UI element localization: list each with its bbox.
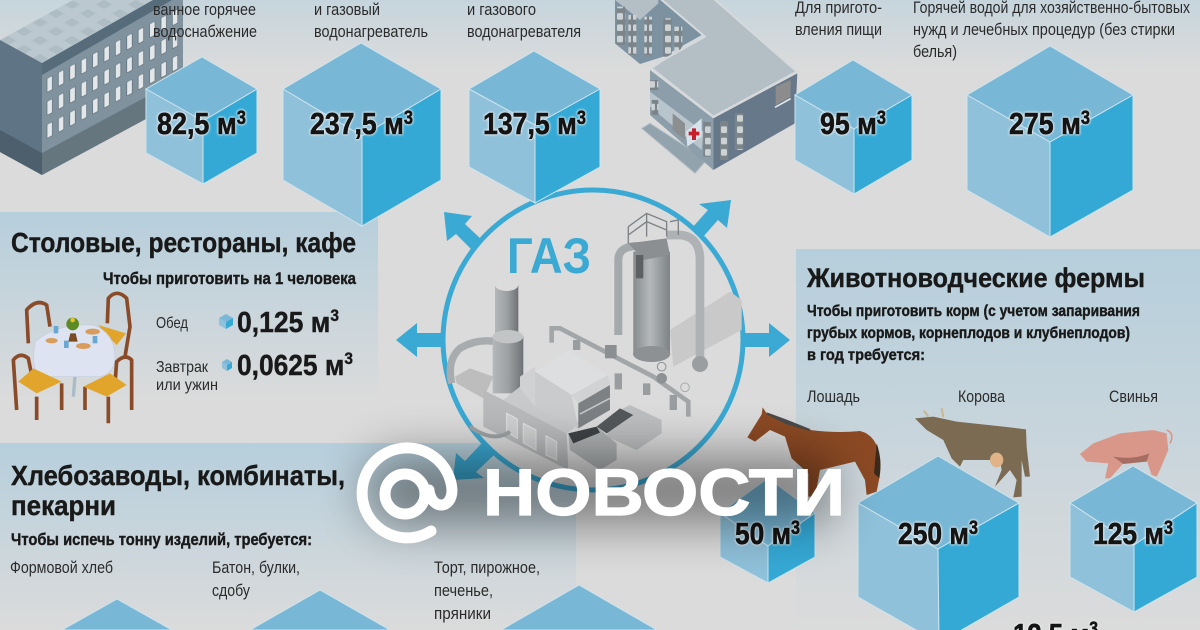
subheading: feed: Чтобы приготовить корм (с учетом запаривания — [807, 303, 1140, 320]
cube: 82,5 m3: 3 — [237, 108, 246, 129]
text: apartments hot water supply: водоснабжение — [153, 22, 257, 41]
label: pig: Свинья — [1109, 387, 1158, 406]
label: cakes and pastries: печенье, — [434, 581, 493, 600]
heading: bakeries: Хлебозаводы, комбинаты, — [11, 460, 345, 491]
panel: canteens and restaurants — [0, 212, 378, 423]
logo: Mail.ru news — [362, 448, 845, 538]
cube: 50 m3: 50 м — [735, 516, 801, 551]
icon: small cube — [222, 359, 232, 371]
label: cow: Корова — [958, 387, 1005, 406]
text: gas stove and water heater: и газовый — [314, 0, 380, 19]
label: tin bread: Формовой хлеб — [10, 558, 113, 577]
illustration: gas turbine machinery — [450, 279, 689, 470]
cube: 275 m3: 3 — [1081, 108, 1090, 129]
text: cooking: вления пищи — [795, 20, 882, 39]
text: cooking — [795, 0, 882, 39]
icon: horse — [747, 407, 881, 497]
cube: 237,5 m3: 237,5 м — [310, 106, 419, 141]
cube: 82,5 m3 — [146, 57, 257, 184]
cube: loaves — [250, 590, 390, 630]
cube: 50 m3: 3 — [791, 518, 800, 539]
cube: tin bread — [62, 599, 172, 630]
icon: hospital — [615, 0, 797, 173]
value: 0,125 m3: 3 — [330, 306, 339, 325]
arrow: upper left — [444, 212, 482, 250]
cube: 250 m3: 250 м — [898, 516, 981, 551]
subheading: feed: в год требуется: — [807, 347, 925, 364]
label: breakfast or dinner — [156, 359, 218, 394]
icon: cow — [915, 408, 1030, 497]
label: loaves and buns: сдобу — [212, 581, 250, 600]
text: no gas water heater: водонагревателя — [467, 22, 581, 41]
label: lunch: Обед — [156, 315, 189, 332]
wordmark: НОВОСТИ — [483, 455, 845, 529]
heading: bakeries — [11, 460, 345, 521]
cube: cakes — [501, 585, 657, 630]
label: cakes and pastries — [434, 558, 540, 623]
arrow: lower left — [453, 443, 494, 480]
text: apartments hot water supply: ванное горячее — [153, 0, 256, 19]
cube: 237,5 m3 — [283, 43, 441, 226]
cube: 95 m3: 3 — [877, 108, 886, 129]
label: breakfast or dinner: Завтрак — [156, 359, 209, 376]
cube: 137,5 m3: 137,5 м — [483, 106, 592, 141]
cube: 50 m3 — [720, 478, 815, 583]
label: horse: Лошадь — [807, 387, 860, 406]
text: gas stove and water heater — [314, 0, 428, 41]
arrow: left — [396, 323, 444, 357]
cube: 125 m3: 125 м — [1093, 516, 1176, 551]
label: breakfast or dinner: или ужин — [156, 377, 218, 394]
cube: 250 m3: 3 — [969, 518, 978, 539]
text: apartments hot water supply — [153, 0, 257, 41]
cube: 95 m3: 95 м — [820, 106, 886, 141]
heading: bakeries: пекарни — [11, 490, 116, 521]
illustration: gas tank with pipes — [618, 213, 742, 372]
label: cakes and pastries: Торт, пирожное, — [434, 558, 540, 577]
value: 0,125 m3: 0,125 м — [237, 307, 339, 339]
arrow: right — [743, 323, 790, 357]
text: no gas water heater — [467, 0, 581, 41]
label: loaves and buns: Батон, булки, — [212, 558, 300, 577]
text: gas stove and water heater: водонагреватель — [314, 22, 428, 41]
cube: 275 m3: 275 м — [1009, 106, 1092, 141]
icon: apartment building — [0, 0, 183, 175]
value: 0,0625 m3: 3 — [344, 349, 353, 368]
value: 0,0625 m3: 0,0625 м — [237, 350, 355, 382]
heading: farms: Животноводческие фермы — [806, 263, 1145, 293]
label: loaves and buns — [212, 558, 300, 600]
heading: gas: ГАЗ — [507, 228, 591, 284]
text: hot water for household needs: белья) — [913, 42, 957, 61]
circle outline — [443, 190, 743, 490]
cube: 125 m3: 3 — [1164, 518, 1173, 539]
icon: dining table with chairs — [13, 293, 132, 423]
cube: 82,5 m3: 82,5 м — [157, 106, 249, 141]
top panel background — [0, 0, 1200, 70]
icon: small cube — [219, 314, 233, 329]
subheading: per ton: Чтобы испечь тонну изделий, требуется: — [11, 530, 312, 549]
subheading: per person: Чтобы приготовить на 1 человека — [103, 269, 356, 288]
icon: pig — [1080, 430, 1172, 478]
panel: livestock farms — [796, 249, 1200, 630]
heading: canteens: Столовые, рестораны, кафе — [11, 227, 356, 258]
label: cakes and pastries: пряники — [434, 604, 491, 623]
arrow: upper right — [692, 200, 731, 238]
cube: 137,5 m3 — [469, 51, 600, 203]
diagram: central gas circle with arrows — [396, 190, 790, 490]
cube: 137,5 m3: 3 — [577, 108, 586, 129]
logo shadow — [365, 455, 835, 525]
cube: 250 m3 — [858, 456, 1019, 630]
cube: 95 m3 — [795, 60, 912, 194]
panel: bakeries — [0, 443, 576, 630]
cube: 237,5 m3: 3 — [404, 108, 413, 129]
cube: 275 m3 — [967, 46, 1133, 237]
icon: at sign — [362, 448, 452, 538]
text: no gas water heater: и газового — [467, 0, 536, 19]
subheading: feed: грубых кормов, корнеплодов и клубнеплодов) — [807, 325, 1130, 342]
text: hot water for household needs — [913, 0, 1190, 61]
cube: 125 m3 — [1070, 466, 1197, 612]
subheading: feed — [807, 303, 1140, 364]
